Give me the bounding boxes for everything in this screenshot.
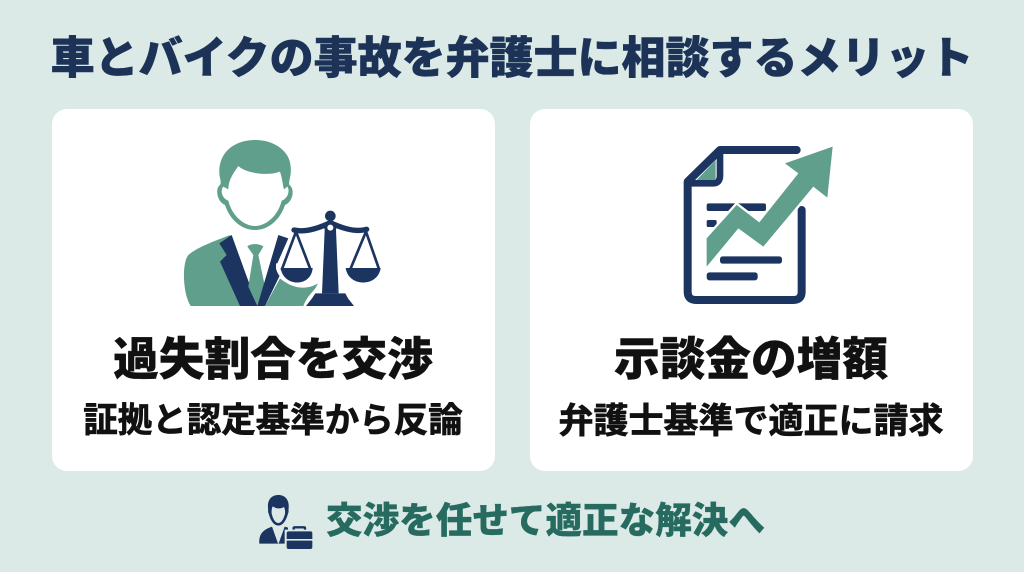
panel: settlement increase [530,109,972,471]
text: negotiate description: 証拠と認定基準から反論 [83,402,463,440]
heading: settlement increase: 示談金の増額 [614,334,888,385]
footer message: 交渉を任せて適正な解決へ [326,500,765,541]
icon: lawyer with briefcase [259,495,312,549]
heading: negotiate fault ratio: 過失割合を交渉 [113,334,433,385]
icon: lawyer with scales [184,140,381,306]
title: 車とバイクの事故を弁護士に相談するメリット [51,34,973,83]
text: settlement description: 弁護士基準で適正に請求 [558,402,944,441]
icon: document with rising arrow [684,146,833,304]
panel: negotiate fault ratio [52,109,494,471]
